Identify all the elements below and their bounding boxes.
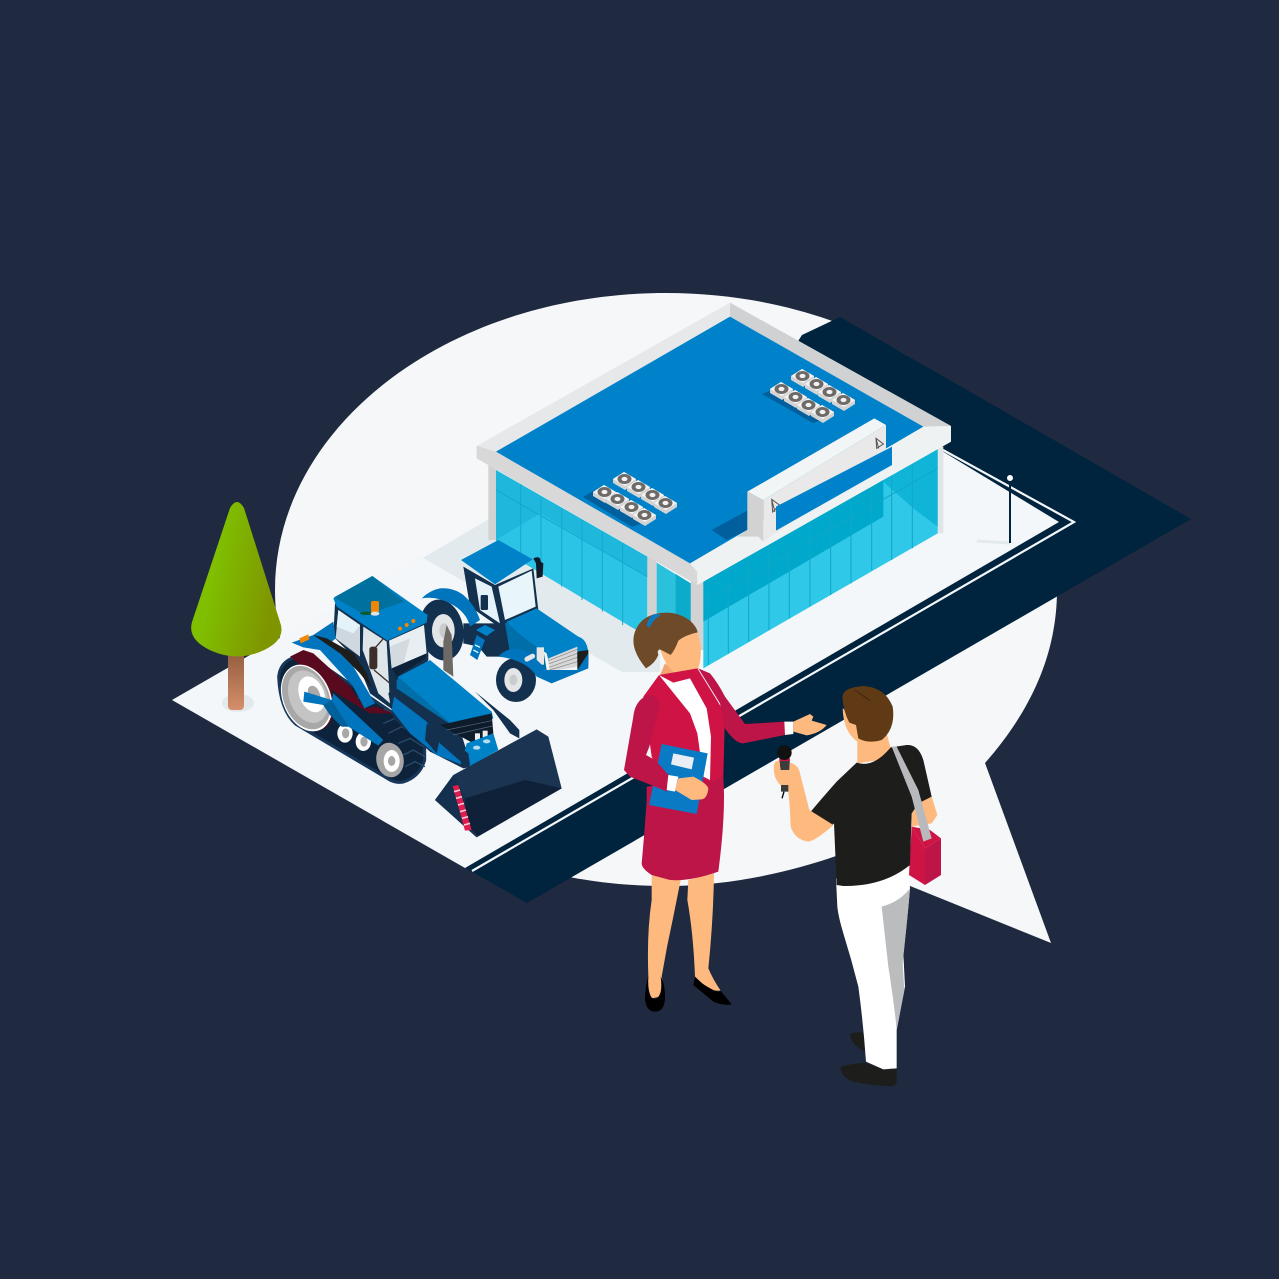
- entrance glass: [657, 563, 691, 653]
- rear wheel: [271, 656, 344, 739]
- rear wheel: [415, 596, 468, 664]
- hood side shade: [397, 678, 457, 728]
- mirror: [533, 557, 543, 578]
- loader arm far: [475, 692, 519, 738]
- cab roof: [461, 540, 533, 584]
- fender light: [299, 634, 309, 643]
- nose lights: [473, 739, 490, 750]
- skirt: [642, 777, 724, 880]
- rooftop sign structure: [737, 418, 886, 542]
- small tractor: [415, 540, 588, 702]
- face: [660, 632, 701, 677]
- front window: [498, 571, 536, 620]
- track tread: [297, 657, 425, 767]
- mic tail and cable: [781, 785, 788, 798]
- hood side: [505, 608, 547, 670]
- neck: [660, 663, 690, 683]
- white top: [659, 675, 711, 780]
- back shoe: [850, 1032, 865, 1052]
- cuff holding: [667, 775, 678, 792]
- tree: [191, 502, 282, 712]
- front nose: [463, 733, 498, 767]
- outstretched arm: [698, 668, 785, 743]
- shirt: [809, 745, 932, 886]
- cab roof: [333, 576, 428, 641]
- folder: [649, 744, 708, 814]
- road: [462, 317, 1191, 903]
- neck and ear: [843, 708, 891, 763]
- step ledge: [476, 625, 495, 636]
- woman: [624, 613, 827, 1012]
- blue fender: [292, 635, 375, 708]
- track: [279, 657, 425, 782]
- cuff: [784, 722, 793, 735]
- grille: [537, 647, 588, 672]
- mirror: [369, 637, 390, 683]
- building: [477, 303, 951, 668]
- exhaust: [443, 625, 453, 677]
- holding arm: [624, 695, 670, 792]
- bucket: [435, 729, 562, 837]
- maroon fender liner: [290, 650, 393, 713]
- fender shoulder: [313, 622, 336, 643]
- sign shadow on roof: [712, 511, 747, 540]
- open hand: [793, 714, 827, 735]
- bag strap: [892, 747, 932, 842]
- front wheel: [496, 658, 536, 702]
- AC units left group: [583, 472, 677, 527]
- AC units right group: [762, 369, 855, 423]
- large tractor with loader: [271, 576, 562, 837]
- legs: [648, 873, 721, 998]
- road wheels: [337, 724, 406, 779]
- road edge line: [472, 450, 1074, 871]
- headlight: [524, 653, 536, 663]
- engine block: [463, 623, 517, 657]
- side window: [475, 578, 500, 623]
- front shoe: [841, 1063, 897, 1086]
- building shadow: [423, 515, 660, 672]
- microphone: [777, 745, 792, 787]
- hood top: [397, 660, 493, 728]
- right glass wall: [703, 448, 938, 668]
- loader arm near: [425, 723, 470, 767]
- black fender strip: [313, 635, 372, 688]
- speech bubble: [275, 293, 1057, 943]
- suspension arm: [303, 692, 383, 746]
- ground lot: [172, 351, 1059, 868]
- roof parapet: [477, 303, 951, 585]
- holding hand: [675, 777, 708, 800]
- hair: [633, 613, 698, 668]
- cab frame: [463, 567, 538, 630]
- side mirror: [481, 595, 488, 610]
- hair: [842, 686, 893, 742]
- lower body: [392, 697, 467, 767]
- front fender and bumper: [498, 649, 588, 683]
- roof lights: [398, 619, 415, 631]
- hair tie: [647, 614, 662, 627]
- rear cab window: [336, 610, 360, 657]
- front cab window: [389, 625, 427, 677]
- blue roof: [496, 317, 923, 563]
- hood: [507, 608, 588, 667]
- jacket: [643, 668, 725, 782]
- arm with hand: [774, 761, 833, 842]
- entrance glass reflection: [676, 574, 691, 633]
- sign board: [776, 447, 892, 531]
- beacon: [360, 601, 379, 616]
- body underside: [388, 683, 472, 768]
- sign brackets: [772, 438, 883, 512]
- step: [470, 635, 485, 660]
- rear fender: [422, 588, 480, 627]
- cab frame: [333, 603, 428, 711]
- shoulder bag: [909, 827, 941, 885]
- trouser far leg: [882, 888, 910, 1030]
- trousers: [836, 865, 910, 1069]
- left glass wall: [496, 470, 647, 637]
- back arm: [912, 797, 937, 827]
- side cab window: [363, 627, 390, 703]
- grille: [440, 713, 493, 743]
- shoes: [645, 976, 732, 1012]
- lamp post: [977, 474, 1014, 543]
- bucket hazard stripes: [453, 785, 472, 831]
- columns: [488, 447, 943, 650]
- man: [774, 686, 941, 1086]
